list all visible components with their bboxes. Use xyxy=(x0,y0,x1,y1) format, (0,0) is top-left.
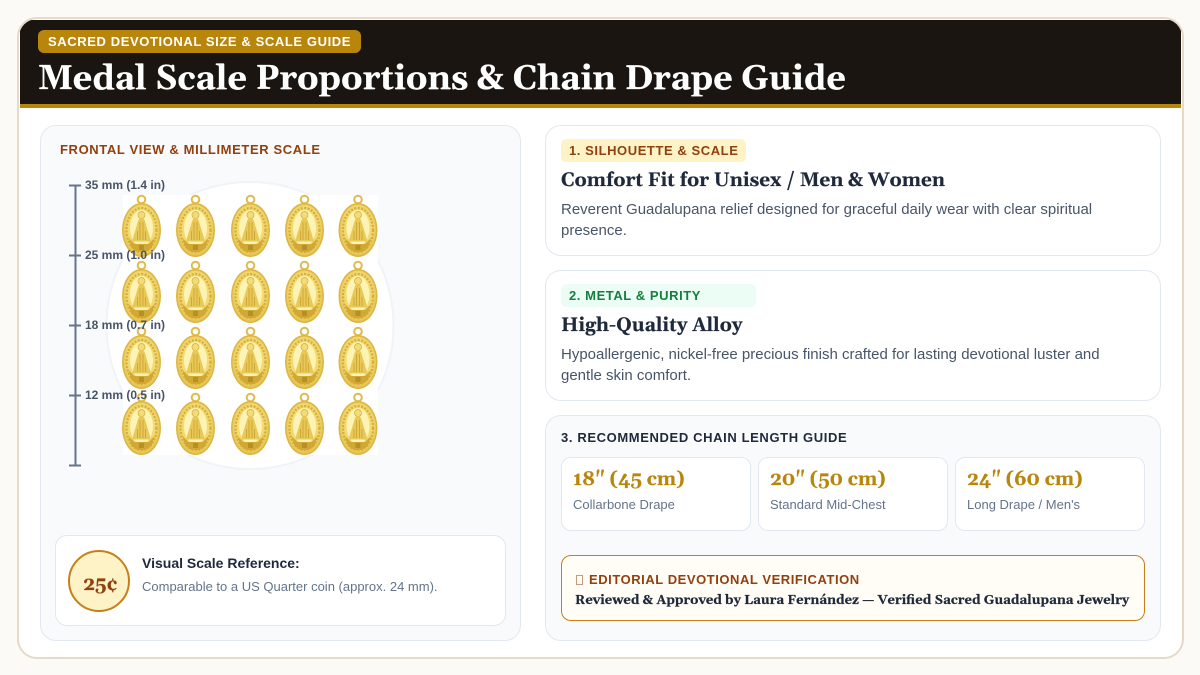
millimeter ruler xyxy=(69,185,81,466)
medal image area xyxy=(122,195,378,455)
panel heading: FRONTAL VIEW & MILLIMETER SCALE xyxy=(60,142,321,157)
chain option: 24 inch: Long Drape / Men's xyxy=(967,497,1080,512)
chain option: 18 inch: 18" (45 cm) xyxy=(573,468,685,492)
verification callout xyxy=(561,555,1145,621)
coin reference box xyxy=(55,535,506,626)
title: Medal Scale Proportions & Chain Drape Guide xyxy=(38,57,846,101)
coin reference note: Comparable to a US Quarter coin (approx. 24 mm). xyxy=(142,579,438,594)
backdrop circle xyxy=(106,182,394,469)
description: Reverent Guadalupana relief designed for graceful daily wear with clear spiritual presence. xyxy=(561,201,1092,239)
scale label: 12 mm: 12 mm (0.5 in) xyxy=(85,388,165,402)
heading: Comfort Fit for Unisex / Men & Women xyxy=(561,169,945,193)
panel: silhouette and scale xyxy=(545,125,1161,256)
heading: High-Quality Alloy xyxy=(561,314,742,338)
eyebrow badge: SACRED DEVOTIONAL SIZE & SCALE GUIDE xyxy=(48,34,351,49)
icon: quarter coin: 25¢ xyxy=(83,573,118,597)
icon: quarter coin xyxy=(68,550,130,612)
chain option: 20 inch: Standard Mid-Chest xyxy=(770,497,886,512)
panel: metal and purity xyxy=(545,270,1161,401)
coin reference title: Visual Scale Reference: xyxy=(142,555,300,571)
tag: 1. SILHOUETTE & SCALE xyxy=(569,143,738,158)
chain option: 18 inch: Collarbone Drape xyxy=(573,497,675,512)
scale label: 18 mm: 18 mm (0.7 in) xyxy=(85,318,165,332)
panel heading: 3. RECOMMENDED CHAIN LENGTH GUIDE xyxy=(561,430,847,445)
panel: chain length guide xyxy=(545,415,1161,641)
callout text: Reviewed & Approved by Laura Fernández — Verified Sacred Guadalupana Jewelry xyxy=(575,593,1129,609)
chain option: 24 inch: 24" (60 cm) xyxy=(967,468,1083,492)
callout title: EDITORIAL DEVOTIONAL VERIFICATION xyxy=(589,572,860,587)
tag xyxy=(561,139,746,162)
scale label: 35 mm: 35 mm (1.4 in) xyxy=(85,178,165,192)
chain option: 20 inch xyxy=(758,457,948,531)
header band xyxy=(20,20,1181,108)
chain option: 18 inch xyxy=(561,457,751,531)
scale label: 25 mm: 25 mm (1.0 in) xyxy=(85,248,165,262)
tag xyxy=(561,284,756,307)
eyebrow badge xyxy=(38,30,361,53)
description: Hypoallergenic, nickel-free precious finish crafted for lasting devotional luster and gentle skin comfort. xyxy=(561,346,1100,384)
panel: frontal view and scale xyxy=(40,125,521,641)
chain option: 20 inch: 20" (50 cm) xyxy=(770,468,886,492)
tag: 2. METAL & PURITY xyxy=(569,288,701,303)
chain option: 24 inch xyxy=(955,457,1145,531)
